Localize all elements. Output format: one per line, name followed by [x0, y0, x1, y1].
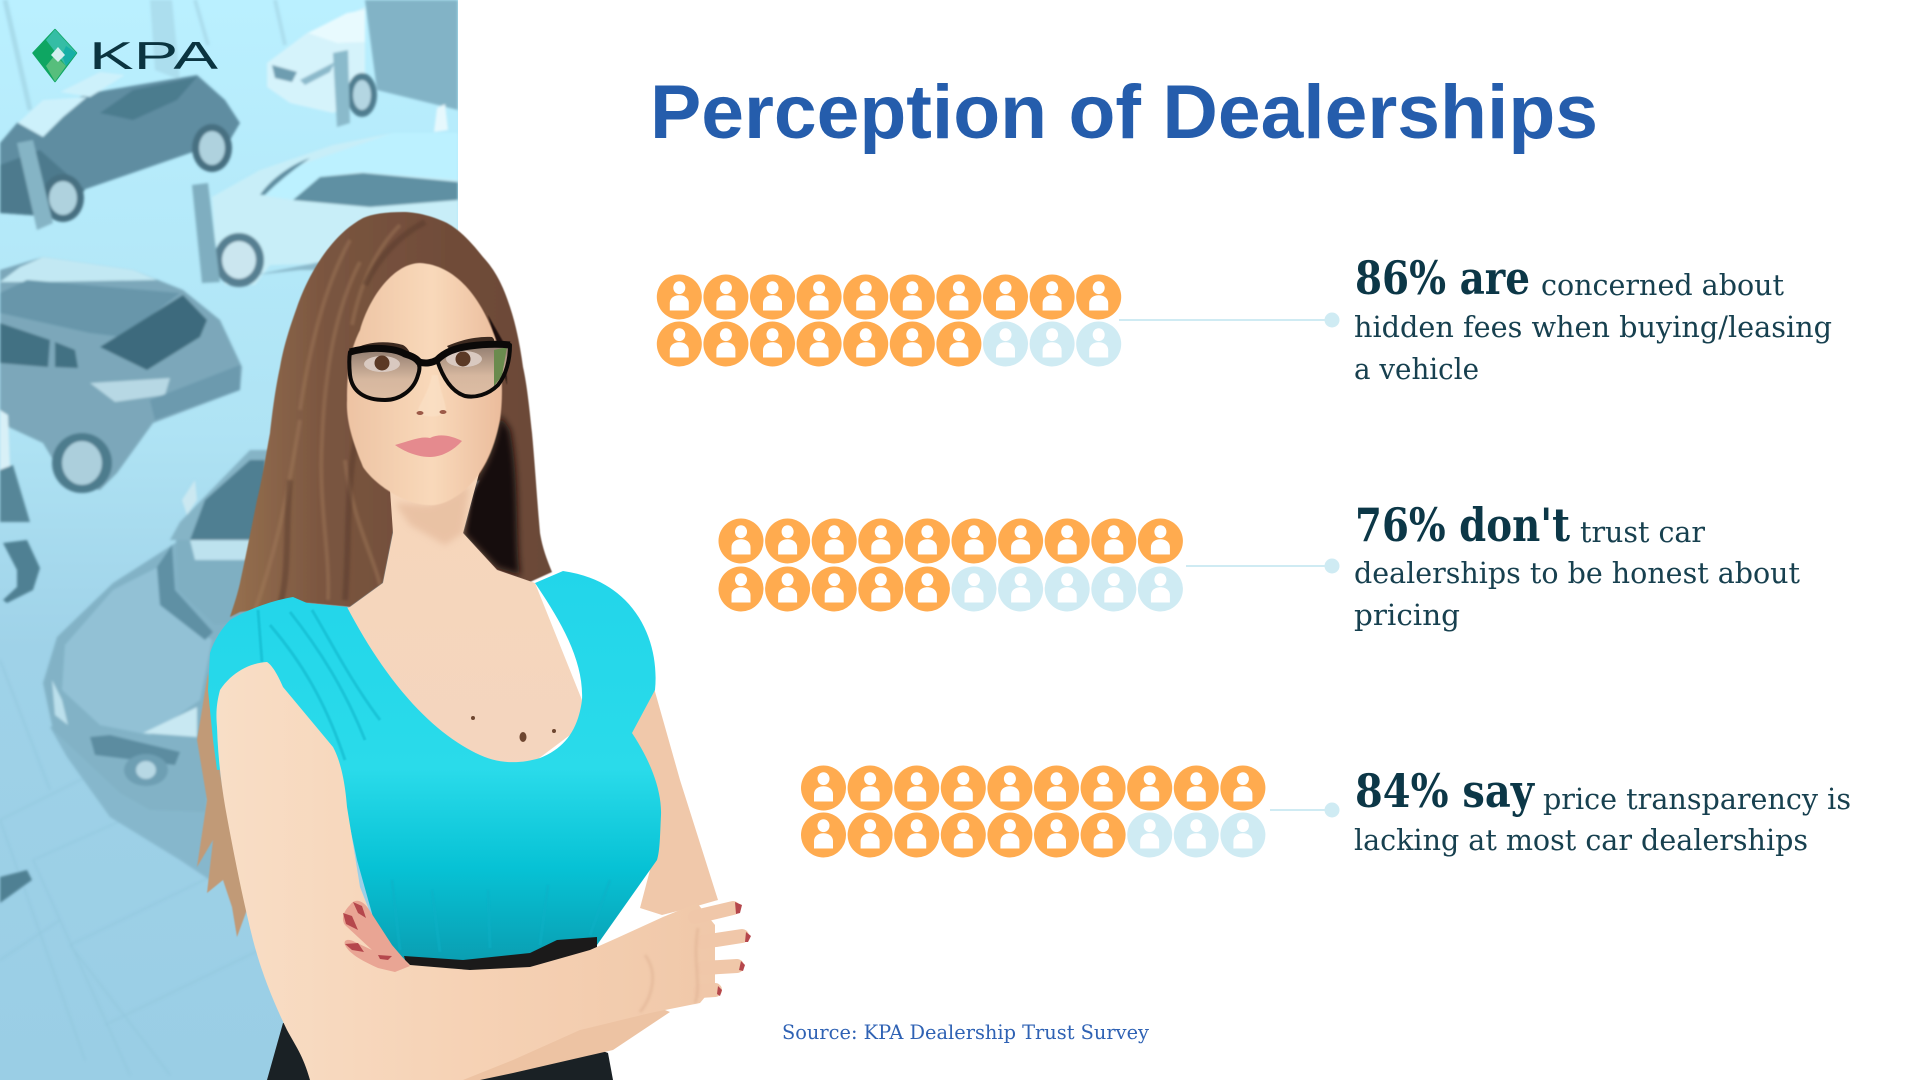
dark hair under jaw: [463, 415, 520, 575]
car: grey SUV rear: [0, 257, 242, 493]
hair highlights: [255, 225, 400, 610]
eyes: [364, 351, 482, 372]
stat text: 86 percent: concerned about: [1541, 268, 1784, 302]
pictogram row: 86 percent group: [657, 274, 1121, 366]
stat text: 86 percent: a vehicle: [1354, 352, 1479, 386]
glasses: [349, 344, 510, 400]
hand knuckle shading: [640, 928, 698, 1012]
turquoise dress: [208, 571, 661, 967]
stat text: 84 percent: lacking at most car dealerships: [1354, 823, 1808, 857]
stat text: 86 percent: 86% are: [1355, 251, 1530, 305]
stat text: 84 percent: price transparency is: [1543, 782, 1851, 816]
right upper arm: [625, 681, 718, 915]
hand fingers: [695, 908, 742, 991]
stat text: 76 percent: trust car: [1580, 515, 1705, 549]
stat text: 84 percent: 84% say: [1355, 764, 1535, 818]
belt: [404, 937, 597, 982]
face: [347, 263, 502, 505]
title: Perception of Dealerships: [650, 70, 1598, 155]
car: white top right: [267, 7, 377, 127]
nose: [416, 375, 446, 416]
hair: [230, 212, 552, 617]
connector: 76 percent: [1186, 558, 1340, 574]
dress folds: [258, 610, 610, 952]
car: front, lower: [43, 540, 250, 880]
stat text: 76 percent: dealerships to be honest about: [1354, 556, 1800, 590]
hair wisps behind arm: [197, 673, 248, 937]
back forearm: [430, 1000, 670, 1080]
eyebrows: [353, 342, 410, 355]
neck and chest: [343, 470, 590, 780]
logo: KPA: [33, 30, 218, 82]
stat text: 76 percent: pricing: [1354, 598, 1460, 632]
stat text: 86 percent: hidden fees when buying/leasing: [1354, 310, 1832, 344]
wordmark: KPA: [89, 35, 218, 78]
car: dark SUV top left: [0, 72, 240, 230]
stat text: 76 percent: [1354, 498, 1800, 632]
source note: Source: KPA Dealership Trust Survey: [782, 1020, 1150, 1044]
lips: [395, 435, 462, 457]
pictogram row: 76 percent group: [718, 518, 1183, 612]
background photo: car dealership showroom: [0, 0, 458, 1080]
black skirt: [267, 1000, 613, 1080]
stat text: 84 percent: [1354, 764, 1851, 857]
hand nails: [717, 902, 751, 996]
stat text: 86 percent: [1354, 251, 1832, 386]
moles on chest: [471, 716, 556, 742]
bystander legs: [3, 540, 40, 603]
showroom columns and floor tiles: [2, 0, 286, 110]
car: light SUV centre: [192, 133, 458, 287]
fingers with red nails: [343, 901, 410, 972]
woman with crossed arms: [197, 212, 751, 1080]
pictogram row: 84 percent group: [801, 766, 1265, 858]
wall block: [365, 0, 458, 110]
arm and forearm: [216, 662, 715, 1080]
bystander and nearby car edge: [0, 410, 10, 470]
connector: 86 percent: [1119, 312, 1340, 328]
icon: diamond mark: [33, 30, 76, 82]
connector: 84 percent: [1270, 802, 1340, 818]
stat text: 76 percent: 76% don't: [1355, 498, 1571, 552]
